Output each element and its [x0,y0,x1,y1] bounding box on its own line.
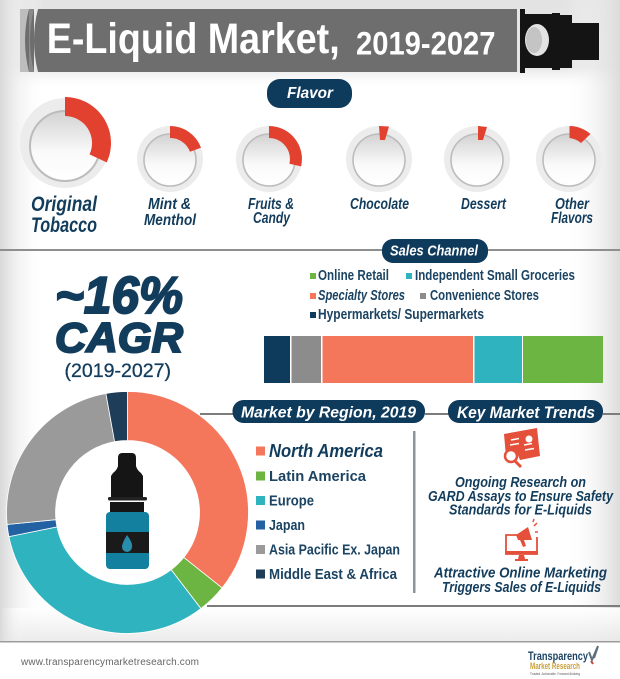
CAGR callout: CAGR [55,314,184,361]
label: Original Tobacco: Tobacco [31,214,97,237]
CAGR callout: (2019-2027) [64,361,171,382]
label: Fruits and Candy: Fruits & [248,196,294,213]
legend: regions: North America [269,441,383,461]
heading: Sales Channel [382,239,488,263]
label: Other Flavors [551,196,593,227]
heading: Market by Region: Market by Region, 2019 [241,404,416,422]
heading: Sales Channel: Sales Channel [390,242,479,260]
label: Other Flavors: Other [555,196,590,213]
heading: Market by Region [232,400,425,423]
legend: regions: Japan [269,517,305,534]
legend: sales channel [310,268,575,323]
legend: sales channel: Specialty Stores [318,288,405,304]
gauge: Original Tobacco [20,97,111,188]
icon: research document with magnifier [504,428,540,467]
heading: Key Market Trends: Key Market Trends [457,403,595,422]
legend: regions [256,441,400,583]
footer url: www.transparencymarketresearch.com [20,657,199,668]
title: E-Liquid Market, [47,15,340,63]
legend: regions: Latin America [269,468,367,485]
gauge: Mint and Menthol [137,126,203,192]
gauge: Dessert [444,126,510,192]
text: trend two [433,566,607,596]
label: Mint and Menthol: Mint & [148,196,191,213]
label: Mint and Menthol [144,196,197,229]
donut chart: market by region [7,392,248,633]
label: Fruits and Candy [248,196,294,227]
icon: monitor with megaphone [505,519,538,561]
CAGR callout: ~16% [55,267,183,325]
label: Other Flavors: Flavors [551,210,593,227]
label: Chocolate: Chocolate [350,196,409,213]
logo: Transparency Market Research: Trusted. Actionable. Forward-thinking [530,671,580,676]
legend: regions: Europe [269,492,314,510]
text: trend one: Ongoing Research on [455,475,586,491]
legend: sales channel: Hypermarkets/ Supermarkets [318,307,484,323]
legend: sales channel: Online Retail [318,268,389,284]
label: Dessert: Dessert [461,196,507,213]
label: Original Tobacco: Original [31,193,98,216]
label: Fruits and Candy: Candy [253,210,291,227]
text: trend one [428,475,614,518]
divider lines: region section [200,413,620,607]
logo: Transparency Market Research [528,646,598,676]
text: trend two: Attractive Online Marketing [433,566,607,582]
stacked bar: sales channel [264,336,603,383]
label: Mint and Menthol: Menthol [144,212,197,229]
gauge: Chocolate [346,126,412,192]
gauge: Fruits and Candy [236,126,302,192]
panel: flavor gauges [20,97,602,237]
heading: Flavor: Flavor [287,85,334,102]
icon: e-liquid bottle [106,453,149,569]
legend: regions: Asia Pacific Ex. Japan [269,542,400,558]
legend: sales channel: Independent Small Groceries [415,268,575,284]
logo: Transparency Market Research: Market Research [530,661,580,671]
gauge: Other Flavors [536,126,602,192]
legend: regions: Middle East & Africa [269,566,398,583]
heading: Flavor [267,79,352,108]
header banner: e-cigarette [20,9,599,73]
title: 2019-2027 [356,26,496,62]
CAGR callout [55,267,184,382]
logo: Transparency Market Research: Transparency [528,649,588,663]
text: trend one: Standards for E-Liquids [449,502,592,518]
label: Original Tobacco [31,193,98,237]
legend: sales channel: Convenience Stores [430,288,539,304]
